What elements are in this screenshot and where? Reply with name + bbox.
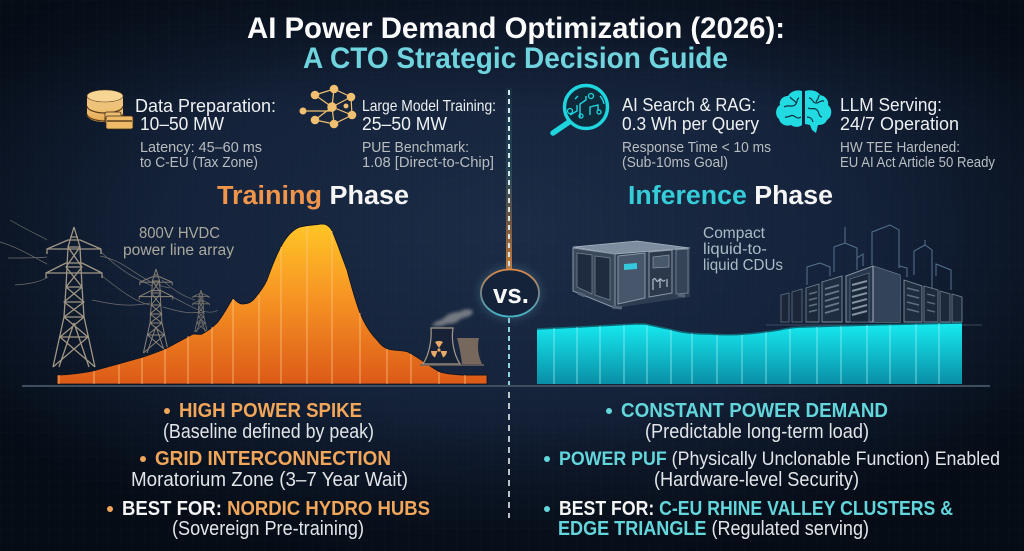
label: compact cdus: liquid CDUs <box>703 257 783 274</box>
vs. badge <box>478 266 542 320</box>
value: 24/7 Operation <box>840 114 959 134</box>
heading: AI Search & RAG: <box>622 95 756 115</box>
bullet: constant power demand <box>606 400 888 443</box>
icon: cdu cabinet <box>573 241 690 308</box>
detail line 2: (Sub-10ms Goal) <box>622 155 728 171</box>
bullet: power puf: (Hardware-level Security) <box>654 469 859 491</box>
label: power line array: 800V HVDC <box>139 225 220 242</box>
bullet: best for rhine valley <box>544 498 953 540</box>
label: compact cdus: liquid-to- <box>703 241 767 258</box>
bullet: high power spike: (Baseline defined by peak) <box>163 421 374 443</box>
list: training characteristics <box>107 400 430 540</box>
detail line 2: EU AI Act Article 50 Ready <box>840 155 996 171</box>
detail line 2: 1.08 [Direct-to-Chip] <box>362 155 494 171</box>
bullet: constant power demand: CONSTANT POWER DEMAND <box>621 400 888 422</box>
heading: LLM Serving: <box>840 95 942 115</box>
chart: inference constant demand <box>537 323 962 384</box>
value: 25–50 MW <box>362 113 447 134</box>
title line 2: A CTO Strategic Decision Guide <box>303 42 728 75</box>
panel: large model training <box>300 85 496 171</box>
heading: Large Model Training: <box>362 98 496 115</box>
vs. badge: vs. <box>493 279 529 309</box>
value: 0.3 Wh per Query <box>622 114 759 134</box>
value: 10–50 MW <box>140 113 224 134</box>
bullet: best for rhine valley: EDGE TRIANGLE (Regulated serving) <box>558 518 869 540</box>
bullet: best for rhine valley: BEST FOR: C-EU RHINE VALLEY CLUSTERS & <box>559 498 953 520</box>
label: compact cdus: Compact <box>703 225 766 242</box>
bullet: high power spike: HIGH POWER SPIKE <box>179 400 362 422</box>
list: inference characteristics <box>544 400 1000 540</box>
bullet: power puf <box>544 448 1000 491</box>
detail line 1: Latency: 45–60 ms <box>140 140 262 156</box>
bullet: constant power demand: (Predictable long-term load) <box>645 421 869 443</box>
icon: city and server racks <box>766 225 982 325</box>
title line 1: AI Power Demand Optimization (2026): <box>247 12 785 45</box>
icon: database <box>87 90 133 129</box>
panel: llm serving <box>776 90 996 171</box>
panel: data preparation <box>87 90 276 171</box>
label: power line array: power line array <box>123 242 234 259</box>
icon: power transmission towers <box>0 220 218 367</box>
bullet: power puf: POWER PUF (Physically Unclonable Function) Enabled <box>559 448 1000 470</box>
label: power line array <box>123 225 234 259</box>
label: compact cdus <box>703 225 783 274</box>
bullet: grid interconnection: GRID INTERCONNECTION <box>155 448 391 470</box>
central divider <box>506 88 512 518</box>
detail line 1: PUE Benchmark: <box>362 140 469 156</box>
icon: neural network <box>300 85 356 128</box>
panel: ai search and rag <box>553 86 771 171</box>
detail line 1: HW TEE Hardened: <box>840 140 960 156</box>
bullet: grid interconnection <box>131 448 408 491</box>
detail line 1: Response Time < 10 ms <box>622 140 771 156</box>
title <box>247 12 785 75</box>
icon: nuclear plant <box>420 309 484 365</box>
bullet: best for nordic hydro hubs: (Sovereign Pre-training) <box>172 518 364 540</box>
heading: Data Preparation: <box>135 96 276 116</box>
bullet: high power spike <box>163 400 374 443</box>
bullet: best for nordic hydro hubs <box>107 498 430 540</box>
chart: training power spike <box>57 224 487 384</box>
icon: magnifier <box>553 86 608 133</box>
heading: inference phase: Inference Phase <box>628 182 833 210</box>
heading: training phase: Training Phase <box>217 182 409 210</box>
icon: brain <box>776 90 831 133</box>
bullet: best for nordic hydro hubs: BEST FOR: NORDIC HYDRO HUBS <box>122 498 430 520</box>
chart baseline <box>22 385 990 387</box>
bullet: grid interconnection: Moratorium Zone (3–7 Year Wait) <box>131 469 408 491</box>
detail line 2: to C-EU (Tax Zone) <box>140 155 258 171</box>
